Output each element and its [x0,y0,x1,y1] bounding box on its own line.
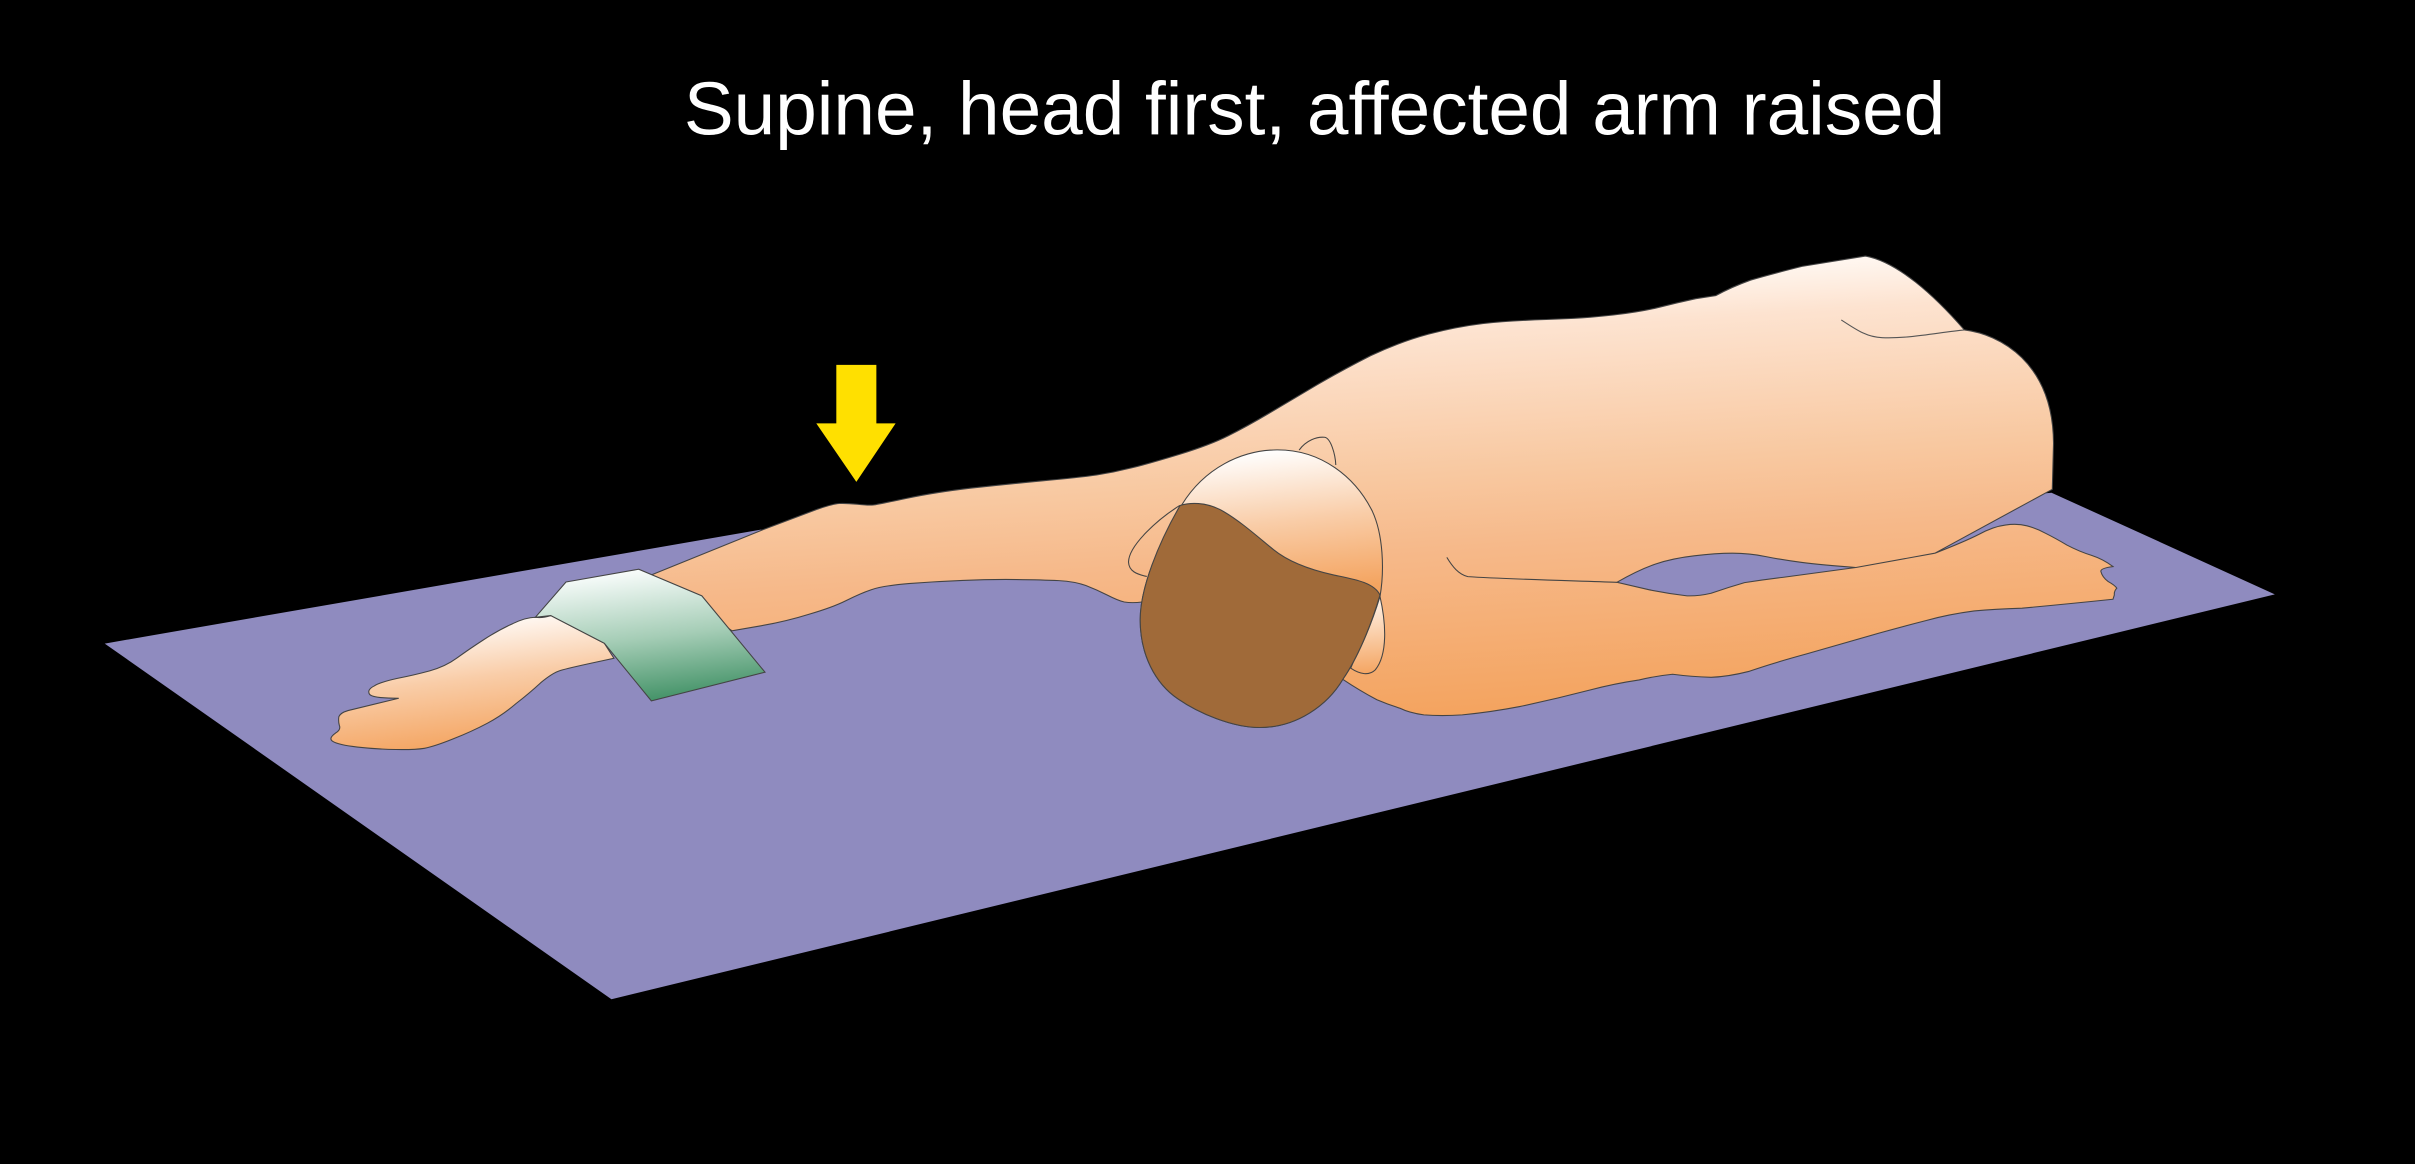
gap between trunk and leg [1617,553,1856,596]
head [1140,450,1382,728]
ear top [1299,437,1336,465]
shoulder crease line [1841,320,1964,338]
arrow pointing at shoulder [816,365,896,482]
title: Supine, head first, affected arm raised [684,67,1945,151]
gauze pad under wrist [535,569,765,701]
leg crease line [1856,553,1935,568]
table surface [105,493,2275,999]
hand and forearm [331,616,614,750]
ear lower right [1351,596,1385,674]
ear left [1128,505,1180,576]
patient body with raised arm and legs [651,256,2117,716]
hair [1140,503,1380,728]
armpit crease line [1447,557,1617,582]
